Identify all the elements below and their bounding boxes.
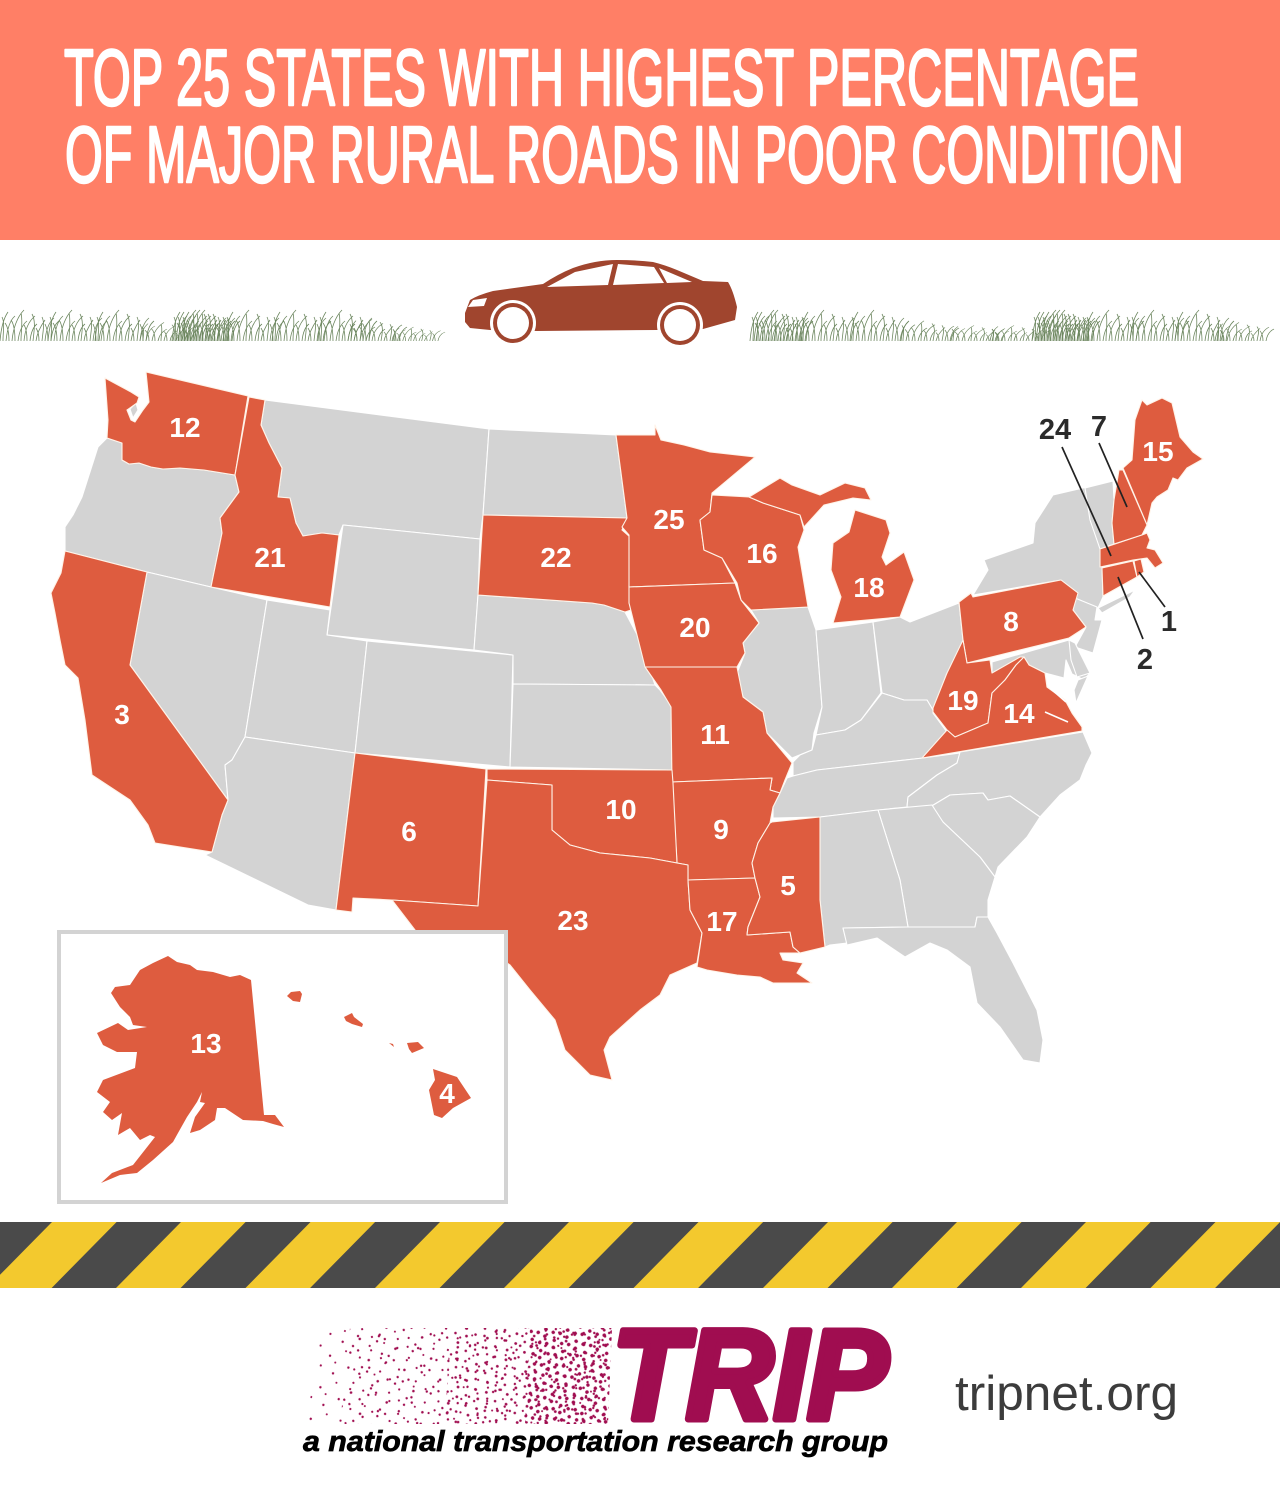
logo: TRIP xyxy=(303,1304,889,1458)
map: Pennsylvania, rank 8: 8 xyxy=(1003,606,1019,637)
map: Iowa, rank 20: 20 xyxy=(679,612,711,643)
map: Oklahoma, rank 10: 10 xyxy=(605,794,637,825)
map: Mississippi, rank 5: 5 xyxy=(780,870,796,901)
map: states not in top 25 xyxy=(65,400,1135,1063)
map: Minnesota, rank 25 xyxy=(616,425,755,587)
map: Texas, rank 23: 23 xyxy=(557,905,589,936)
map: Oklahoma, rank 10 xyxy=(487,769,677,863)
callout: New England rank labels and leader lines: 2 xyxy=(1137,644,1153,676)
map: New Mexico, rank 6: 6 xyxy=(401,816,417,847)
callout: New England rank labels and leader lines xyxy=(1039,411,1177,676)
map: Louisiana, rank 17 xyxy=(688,878,812,983)
map: Michigan, rank 18 xyxy=(749,478,914,623)
map: Hawaii, rank 4: 4 xyxy=(439,1078,455,1109)
map: Maine, rank 15 xyxy=(1123,398,1203,525)
callout: New England rank labels and leader lines: 24 xyxy=(1039,414,1071,446)
map: Maine, rank 15: 15 xyxy=(1142,436,1174,467)
logo speckle fade xyxy=(306,1328,612,1424)
map: Alaska, rank 13 xyxy=(97,956,284,1183)
map: Connecticut, rank 2 xyxy=(1102,561,1137,596)
map: Minnesota, rank 25: 25 xyxy=(653,504,685,535)
map: Rhode Island, rank 1 xyxy=(1134,559,1144,577)
header banner xyxy=(0,0,1280,240)
logo tagline: a national transportation research group xyxy=(303,1426,888,1458)
map: Texas, rank 23 xyxy=(392,780,702,1080)
callout: New England rank labels and leader lines: 7 xyxy=(1091,411,1107,443)
map: Wisconsin, rank 16 xyxy=(700,495,808,610)
map: Wisconsin, rank 16: 16 xyxy=(746,538,778,569)
map: West Virginia, rank 19 xyxy=(933,640,1024,737)
panel: Alaska and Hawaii inset xyxy=(59,932,506,1202)
map: Virginia, rank 14: 14 xyxy=(1003,698,1035,729)
map: South Dakota, rank 22 xyxy=(478,515,631,612)
map: South Dakota, rank 22: 22 xyxy=(540,542,572,573)
map: New Mexico, rank 6 xyxy=(336,753,486,912)
map: Hawaii, rank 4 xyxy=(287,991,471,1118)
map: Massachusetts, rank 24 xyxy=(1100,533,1163,568)
hazard stripe band xyxy=(0,1222,1280,1288)
map: Michigan, rank 18: 18 xyxy=(853,572,885,603)
map: Arkansas, rank 9 xyxy=(672,778,780,880)
callout: New England rank labels and leader lines: 1 xyxy=(1161,606,1177,638)
grass right xyxy=(750,310,1274,341)
grass left xyxy=(0,310,445,341)
map: Missouri, rank 11 xyxy=(645,667,792,793)
icon: car xyxy=(465,260,737,348)
map: Pennsylvania, rank 8 xyxy=(959,580,1086,663)
map: Iowa, rank 20 xyxy=(629,583,759,667)
map: Idaho, rank 21: 21 xyxy=(254,542,286,573)
map: Mississippi, rank 5 xyxy=(747,817,825,953)
map: West Virginia, rank 19: 19 xyxy=(947,685,979,716)
map: Missouri, rank 11: 11 xyxy=(700,719,730,750)
map: Arkansas, rank 9: 9 xyxy=(713,814,729,845)
map: Washington, rank 12 xyxy=(105,372,248,475)
map: New Hampshire, rank 7 xyxy=(1112,470,1147,544)
website url: tripnet.org xyxy=(955,1366,1178,1421)
map: Virginia, rank 14 xyxy=(922,657,1082,758)
logo wordmark: TRIP xyxy=(612,1304,889,1447)
map: California, rank 3 xyxy=(51,551,228,852)
map: Louisiana, rank 17: 17 xyxy=(706,906,738,937)
map: Washington, rank 12: 12 xyxy=(169,412,201,443)
map: Alaska, rank 13: 13 xyxy=(190,1028,222,1059)
map: California, rank 3: 3 xyxy=(114,699,130,730)
map: Idaho, rank 21 xyxy=(211,397,339,607)
